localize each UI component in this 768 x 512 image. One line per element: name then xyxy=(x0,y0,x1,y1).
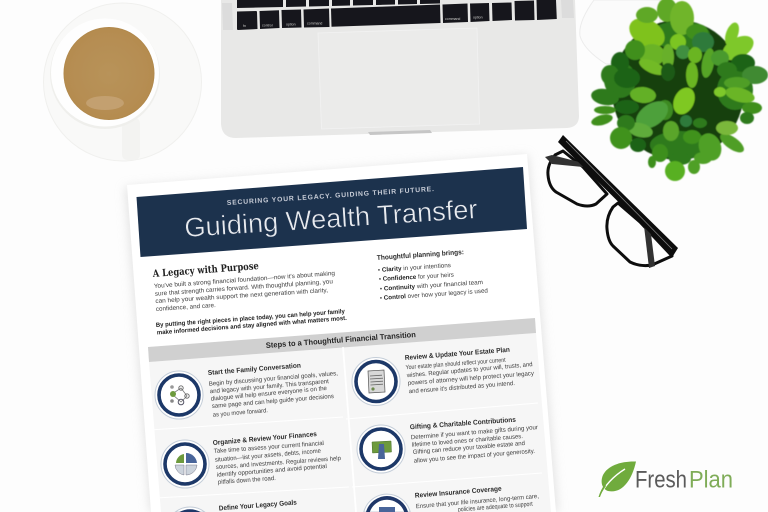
icon: insurance, cropped by page edge xyxy=(364,494,410,512)
step: start the family conversation: and legacy with your family. This transparent xyxy=(210,378,329,395)
step: gifting and charitable contributions: allow you to see the impact of your generosity. xyxy=(414,448,535,465)
keyboard xyxy=(237,0,557,30)
step: review and update your estate plan: powers of attorney will help protect your legacy xyxy=(408,370,535,387)
paper shadow xyxy=(125,155,558,512)
title banner xyxy=(136,167,527,257)
step: start the family conversation xyxy=(155,363,338,419)
trackpad xyxy=(318,28,480,129)
section: thoughtful planning brings: Thoughtful planning brings: xyxy=(377,249,464,262)
coffee cup and saucer xyxy=(44,3,202,161)
section: a legacy with purpose: You've built a strong financial foundation—now it's about making xyxy=(154,270,336,290)
step: start the family conversation: dialogue will help ensure everyone is on the xyxy=(211,385,328,403)
step: review and update your estate plan xyxy=(352,347,535,406)
icon: leaf xyxy=(598,461,636,497)
step: start the family conversation: same page and can help guide your decisions xyxy=(212,393,334,410)
step: start the family conversation: Begin by discussing your financial goals, values, xyxy=(209,370,338,388)
heading: A Legacy with Purpose xyxy=(152,261,259,280)
wordmark: Fresh xyxy=(635,466,687,494)
step: review and update your estate plan: wishes. Regular updates to your will, trusts, and xyxy=(406,361,533,379)
FreshPlan logo: Plan xyxy=(689,466,733,494)
icon: finance pie xyxy=(161,440,209,488)
step: organize and review your finances: pitfalls down the road. xyxy=(218,475,276,486)
lens frame right xyxy=(607,203,672,266)
step: review and update your estate plan: Review & Update Your Estate Plan xyxy=(405,347,510,362)
step: organize and review your finances: situation—list your assets, debts, income xyxy=(215,448,322,464)
FreshPlan logo xyxy=(598,461,733,497)
step: gifting and charitable contributions: lifetime to loved ones or charitable causes. xyxy=(412,433,523,449)
laptop: control xyxy=(262,24,273,28)
icon: will document xyxy=(352,358,400,406)
step: organize and review your finances: Organize & Review Your Finances xyxy=(213,431,317,447)
steps heading bar: Steps to a Thoughtful Financial Transition xyxy=(265,330,416,350)
section: thoughtful planning brings: • Continuity with your financial team xyxy=(380,279,483,293)
steps heading bar xyxy=(148,318,536,362)
laptop: command xyxy=(445,17,460,21)
section: thoughtful planning brings xyxy=(377,249,489,302)
infographic flyer sheet xyxy=(127,154,556,512)
step: organize and review your finances xyxy=(161,431,342,488)
laptop: fn xyxy=(243,24,246,28)
step: review insurance coverage: Ensure that your life insurance, long-term care, xyxy=(416,493,539,510)
section: a legacy with purpose: sure that strength carries forward. With thoughtful planning, you xyxy=(155,278,334,298)
section: thoughtful planning brings: • Confidence for your heirs xyxy=(379,272,454,283)
computer mouse xyxy=(580,0,660,64)
step: gifting and charitable contributions: Determine if you want to make gifts during your xyxy=(411,424,538,441)
icon: gifting xyxy=(357,425,405,473)
section: a legacy with purpose: confidence, and care. xyxy=(156,302,216,313)
section: thoughtful planning brings: • Clarity in your intentions xyxy=(378,262,451,274)
temple arm left xyxy=(545,155,583,167)
tagline: SECURING YOUR LEGACY. GUIDING THEIR FUTURE. xyxy=(227,186,434,207)
section: a legacy with purpose: make informed decisions and stay aligned with what matters most. xyxy=(157,315,347,336)
title: Guiding Wealth Transfer xyxy=(183,194,478,243)
laptop xyxy=(221,0,579,138)
step: review insurance coverage xyxy=(364,486,539,512)
eyeglasses xyxy=(545,135,678,268)
step: define your legacy goals xyxy=(175,500,297,512)
steps panel background xyxy=(149,333,551,512)
laptop: option xyxy=(286,22,296,26)
lens frame left xyxy=(548,151,607,206)
step: start the family conversation: Start the Family Conversation xyxy=(208,363,301,377)
step: start the family conversation: as you move forward. xyxy=(213,407,268,419)
step: review and update your estate plan: Your estate plan should reflect your current xyxy=(405,357,506,371)
step: organize and review your finances: sources, and investments. Regular reviews help xyxy=(216,455,342,471)
temple arm right xyxy=(644,226,655,268)
laptop: command xyxy=(307,22,322,26)
step: organize and review your finances: Take time to assess your current financial xyxy=(214,440,324,455)
laptop: option xyxy=(473,16,483,20)
icon: family network xyxy=(155,371,203,419)
potted plant xyxy=(590,0,768,181)
step: gifting and charitable contributions: Gifting can reduce your taxable estate and xyxy=(413,440,526,456)
section: a legacy with purpose: By putting the right pieces in place today, you can help your family xyxy=(156,308,346,329)
step: gifting and charitable contributions xyxy=(357,417,538,473)
section: a legacy with purpose: can help your wealth support the next generation with clarity, xyxy=(155,287,328,305)
icon: legacy goals, cropped by page edge xyxy=(175,507,205,512)
step: review insurance coverage: Review Insurance Coverage xyxy=(415,486,502,500)
step: organize and review your finances: identify opportunities and avoid potential xyxy=(217,463,327,479)
section: a legacy with purpose xyxy=(152,261,347,336)
step: gifting and charitable contributions: Gifting & Charitable Contributions xyxy=(410,417,516,431)
step: review and update your estate plan: and ensure it's distributed as you intend. xyxy=(409,380,515,395)
section: thoughtful planning brings: • Control over how your legacy is used xyxy=(380,287,489,302)
top bar xyxy=(558,135,678,256)
